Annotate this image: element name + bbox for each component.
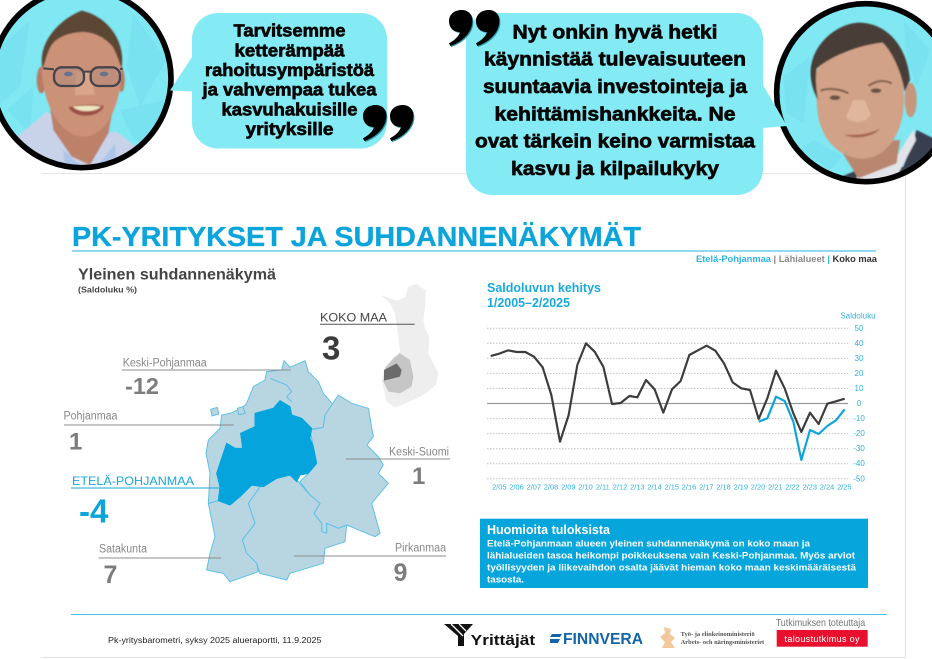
map label: Keski-Pohjanmaa [122, 358, 291, 399]
map label: Etelä-Pohjanmaa: ETELÄ-POHJANMAA [72, 474, 194, 488]
line chart: balance figure trend: 20 [855, 369, 864, 378]
line chart: balance figure trend: -10 [853, 414, 865, 423]
map label: Keski-Pohjanmaa: -12 [125, 373, 159, 399]
line chart: balance figure trend: -50 [853, 474, 865, 484]
legend: Etelä-Pohjanmaa | Lähialueet | Koko maa [696, 254, 878, 264]
portrait: left speaker [0, 0, 177, 173]
map label: Keski-Suomi [346, 447, 450, 490]
heading: general outlook: (Saldoluku %) [78, 286, 137, 295]
line chart: balance figure trend: 2/15 [665, 482, 679, 492]
chart heading [487, 281, 601, 310]
speech bubble: left quote: kasvuhakuisille [222, 99, 358, 119]
panel: notes on results: lähialueiden tasoa heikompi poikkeuksena vain Keski-Pohjanmaa. Myös arviot [487, 550, 855, 560]
line chart: balance figure trend: 2/22 [785, 482, 800, 492]
heading: general outlook: Yleinen suhdannenäkymä [78, 266, 276, 283]
line chart: balance figure trend: 2/16 [682, 482, 696, 492]
line chart: balance figure trend: -20 [853, 429, 865, 438]
line chart: balance figure trend: 2/09 [561, 482, 575, 492]
title: PK-YRITYKSET JA SUHDANNENÄKYMÄT [72, 221, 641, 252]
panel: notes on results: työllisyyden ja liikevaihdon osalta jäävät hieman koko maan keskimääräisestä [487, 562, 857, 572]
speech bubble: left quote: yrityksille [246, 119, 334, 139]
map label: Pirkanmaa: 9 [394, 559, 407, 587]
panel: notes on results [480, 519, 868, 588]
logo: ministry: Arbets- och näringsministeriet [681, 639, 765, 646]
line chart: balance figure trend: Saldoluku [840, 312, 876, 321]
logo: Finnvera: FINNVERA [563, 631, 643, 648]
line chart: balance figure trend: 2/17 [699, 482, 713, 492]
line chart: balance figure trend: 2/12 [613, 482, 627, 492]
portrait: right speaker [773, 0, 932, 187]
map label: Koko maa [320, 311, 415, 366]
footer source text: Pk-yritysbarometri, syksy 2025 alueraportti, 11.9.2025 [108, 635, 322, 645]
line chart: balance figure trend: -30 [853, 444, 865, 453]
map label: Pirkanmaa: Pirkanmaa [395, 543, 447, 555]
speech bubble: left quote: rahoitusympäristöä [205, 60, 374, 80]
speech bubble: right quote: käynnistää tulevaisuuteen [484, 49, 746, 71]
line chart: balance figure trend: 0 [857, 399, 862, 408]
speech bubble: left quote: ja vahvempaa tukea [201, 80, 377, 100]
panel: notes on results: tasosta. [487, 574, 524, 584]
logo: Taloustutkimus: Tutkimuksen toteuttaja [776, 617, 865, 629]
line chart: balance figure trend: 2/13 [630, 482, 644, 492]
line chart: balance figure trend [487, 312, 876, 492]
line chart: balance figure trend: -40 [853, 459, 865, 468]
map label: Pohjanmaa: Pohjanmaa [64, 410, 118, 422]
region: Pirkanmaa [242, 475, 347, 580]
map label: Satakunta [98, 544, 221, 589]
line chart: balance figure trend: 50 [855, 324, 864, 333]
line chart: balance figure trend: 2/20 [751, 482, 765, 492]
icon: Finland locator map [381, 284, 438, 407]
line chart: balance figure trend: 2/25 [837, 482, 851, 492]
map label: Keski-Suomi: 1 [412, 463, 425, 490]
map label: Keski-Pohjanmaa: Keski-Pohjanmaa [123, 358, 207, 370]
map label: Etelä-Pohjanmaa [71, 474, 223, 530]
icon: opening quotation marks [449, 10, 500, 47]
line chart: balance figure trend: 2/07 [527, 482, 541, 492]
map label: Pohjanmaa [64, 410, 234, 455]
line chart: balance figure trend: 2/19 [734, 482, 748, 492]
speech bubble: right quote: Nyt onkin hyvä hetki [512, 21, 718, 43]
map label: Satakunta: Satakunta [99, 544, 148, 556]
logo: Yrittäjät: Yrittäjät [471, 632, 535, 649]
line chart: balance figure trend: 10 [855, 384, 864, 393]
chart heading: Saldoluvun kehitys [487, 281, 601, 295]
panel: notes on results: Huomioita tuloksista [487, 523, 611, 537]
logo: ministry [660, 627, 765, 648]
map label: Pohjanmaa: 1 [69, 428, 82, 455]
region: Etelä-Pohjanmaa [217, 401, 317, 505]
line chart: balance figure trend: 2/11 [596, 482, 610, 492]
speech bubble: right quote: kasvu ja kilpailukyky [511, 158, 719, 180]
line chart: balance figure trend: 2/08 [544, 482, 558, 492]
line chart: balance figure trend: 2/21 [768, 482, 782, 492]
map label: Satakunta: 7 [104, 561, 117, 589]
line chart: balance figure trend: 2/10 [578, 482, 593, 492]
map label: Keski-Suomi: Keski-Suomi [389, 447, 449, 459]
logo: Taloustutkimus: taloustutkimus oy [784, 634, 860, 644]
logo: Yrittäjät [444, 624, 535, 649]
speech bubble: right quote: suuntaavia investointeja ja [483, 76, 748, 98]
panel: notes on results: Etelä-Pohjanmaan alueen yleinen suhdannenäkymä on koko maan ja [487, 539, 811, 549]
region: Satakunta [207, 485, 260, 582]
page frame [42, 174, 906, 658]
region: Keski-Suomi [300, 395, 388, 537]
map label: Etelä-Pohjanmaa: -4 [79, 493, 109, 530]
speech bubble: left quote: Tarvitsemme [234, 21, 346, 41]
icon: closing quotation marks [363, 105, 414, 142]
line chart: balance figure trend: 2/05 [492, 482, 506, 492]
map label: Koko maa: KOKO MAA [320, 311, 387, 325]
line chart: balance figure trend: 30 [855, 354, 864, 363]
chart heading: 1/2005–2/2025 [487, 296, 570, 310]
map label: Pirkanmaa [294, 543, 447, 587]
regional map [206, 361, 388, 582]
speech bubble: left quote [170, 13, 387, 148]
line chart: balance figure trend: 2/18 [716, 482, 731, 492]
map label: Koko maa: 3 [322, 329, 340, 366]
heading: general outlook [78, 266, 276, 295]
region: Keski-Pohjanmaa and Pohjanmaa [206, 361, 333, 503]
speech bubble: right quote: kehittämishankkeita. Ne [494, 103, 736, 125]
line chart: balance figure trend: 2/06 [509, 482, 524, 492]
logo: Taloustutkimus [776, 617, 868, 647]
line chart: balance figure trend: 2/24 [820, 482, 834, 492]
speech bubble: right quote [466, 13, 787, 195]
line chart: balance figure trend: 40 [855, 339, 864, 348]
speech bubble: left quote: ketterämpää [234, 40, 345, 60]
line chart: balance figure trend: 2/23 [803, 482, 817, 492]
logo: ministry: Työ- ja elinkeinoministeriö [681, 631, 755, 638]
speech bubble: right quote: ovat tärkein keino varmistaa [475, 131, 756, 153]
line chart: balance figure trend: 2/14 [647, 482, 662, 492]
